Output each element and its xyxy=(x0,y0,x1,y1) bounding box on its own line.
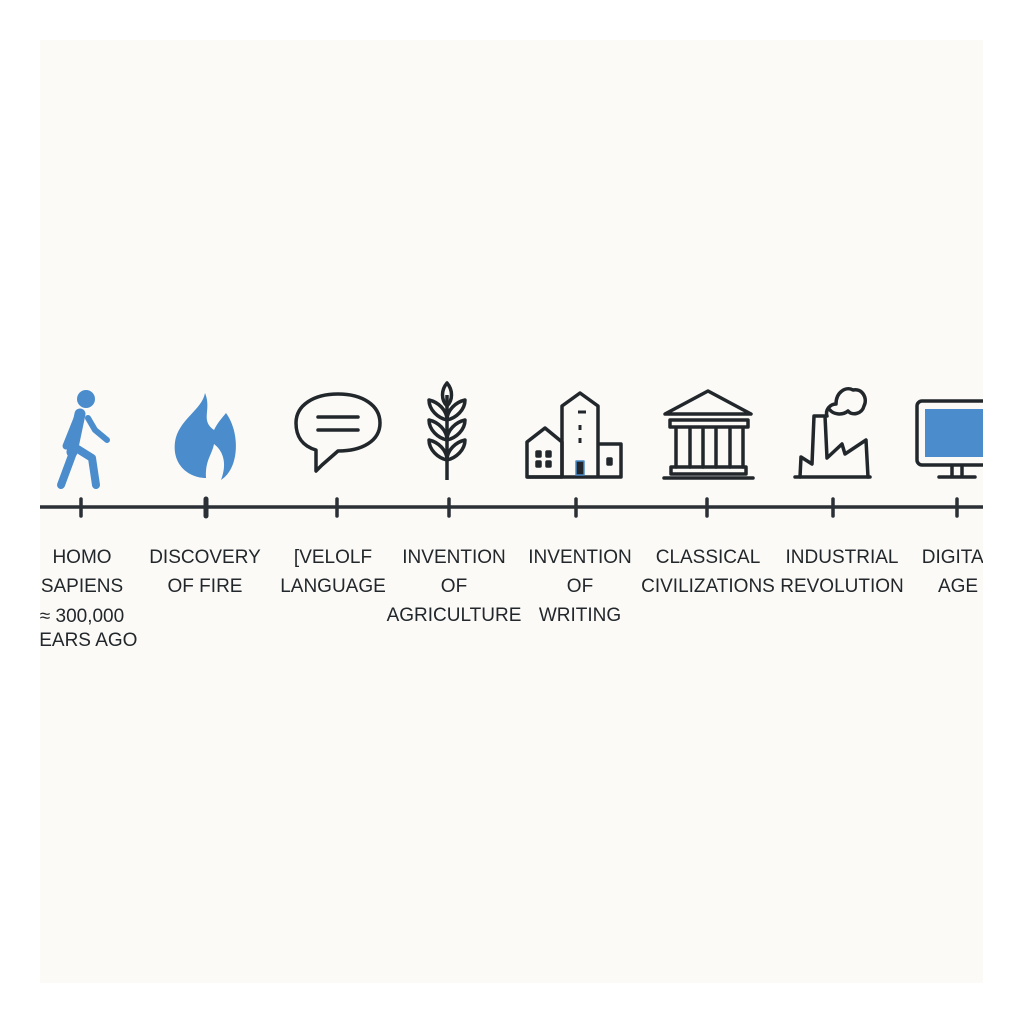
label: agriculture: AGRICULTURE xyxy=(387,605,521,626)
label: industrial revolution xyxy=(782,550,902,592)
timeline axis xyxy=(40,499,990,516)
label: agriculture: OF xyxy=(441,576,467,597)
label: discovery of fire: DISCOVERY xyxy=(149,547,261,568)
icon: buildings xyxy=(527,393,621,477)
label: digital age: DIGITAL xyxy=(922,547,994,568)
label: homo sapiens: HOMO xyxy=(52,547,112,568)
label: homo sapiens: ≈ 300,000 xyxy=(40,606,124,627)
label: digital age: AGE xyxy=(938,576,978,597)
label: writing: INVENTION xyxy=(528,547,632,568)
label: classical civilizations xyxy=(642,550,774,592)
label: classical civilizations: CIVILIZATIONS xyxy=(641,576,775,597)
label: agriculture: INVENTION xyxy=(402,547,506,568)
icon: fire xyxy=(175,393,236,480)
label: industrial revolution: REVOLUTION xyxy=(780,576,904,597)
label: discovery of fire: OF FIRE xyxy=(168,576,242,597)
icon: classical temple xyxy=(664,391,753,478)
label: writing: WRITING xyxy=(539,605,621,626)
icon: computer monitor xyxy=(915,399,983,479)
label: industrial revolution: INDUSTRIAL xyxy=(786,547,898,568)
label: digital age xyxy=(923,550,983,592)
icon: speech bubble xyxy=(296,394,380,471)
label: language xyxy=(282,549,385,592)
label: homo sapiens xyxy=(40,550,136,646)
label: writing: OF xyxy=(567,576,593,597)
label: language: [VELOLF xyxy=(294,547,372,568)
icon: walking person xyxy=(61,390,107,485)
label: discovery of fire xyxy=(150,550,260,592)
label: language: LANGUAGE xyxy=(280,576,386,597)
icon: factory xyxy=(795,389,870,477)
label: writing xyxy=(530,550,630,621)
icon: wheat xyxy=(429,383,465,480)
label: homo sapiens: YEARS AGO xyxy=(27,630,137,651)
label: classical civilizations: CLASSICAL xyxy=(656,547,760,568)
label: agriculture xyxy=(387,547,521,626)
label: homo sapiens: SAPIENS xyxy=(41,576,123,597)
